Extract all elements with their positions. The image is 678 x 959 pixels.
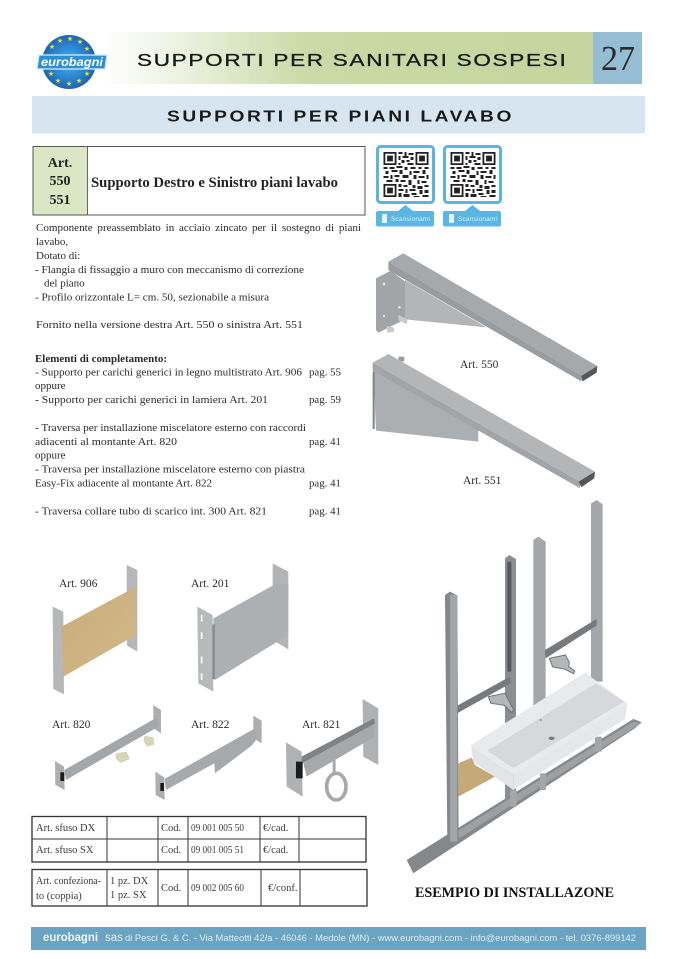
label: Art. 821: Art. 821	[302, 719, 341, 731]
label: Art. 906: Art. 906	[59, 578, 98, 590]
completion elements list: - Supporto per carichi generici in lamiera Art. 201	[35, 394, 268, 406]
product image: Art. 906	[53, 565, 137, 694]
product image: Art. 201	[197, 563, 288, 692]
table: packaged pair: Cod.	[161, 883, 181, 894]
icon: eurobagni logo: ★	[67, 35, 73, 43]
completion elements list: pag. 41	[309, 436, 341, 448]
page number box	[593, 32, 642, 84]
table: packaged pair: 09 002 005 60	[191, 883, 244, 894]
product image: Art. 821	[286, 699, 378, 800]
description text: Fornito nella versione destra Art. 550 o sinistra Art. 551	[36, 319, 303, 331]
cross feet	[510, 737, 602, 807]
completion elements list: - Supporto per carichi generici in legno multistrato Art. 906	[35, 366, 303, 378]
completion elements list: pag. 55	[309, 366, 341, 378]
product image: bracket Art. 551	[373, 354, 595, 488]
icon: eurobagni logo: ★	[84, 45, 90, 53]
QR code 2	[443, 146, 501, 226]
article title table: Art.	[48, 156, 72, 171]
completion elements list: - Traversa per installazione miscelatore esterno con piastra	[35, 464, 305, 476]
table: packaged pair: to (coppia)	[36, 891, 82, 902]
icon: eurobagni logo: ★	[55, 77, 61, 85]
description text	[35, 222, 361, 331]
completion elements list: - Traversa per installazione miscelatore esterno con raccordi	[35, 422, 306, 434]
QR code 1: Scansionami	[391, 216, 430, 223]
icon: eurobagni logo: eurobagni	[41, 55, 104, 69]
description text: lavabo,	[36, 236, 68, 248]
QR code 2: Scansionami	[458, 216, 497, 223]
description text: - Flangia di fissaggio a muro con meccanismo di correzione	[35, 264, 304, 276]
table: loose articles	[32, 816, 366, 862]
icon: eurobagni logo: ★	[76, 77, 82, 85]
header band	[103, 32, 593, 84]
header title: SUPPORTI PER SANITARI SOSPESI	[137, 51, 566, 70]
front upright	[445, 592, 459, 842]
label: Art. 820: Art. 820	[52, 719, 91, 731]
article title table: 550	[50, 174, 70, 189]
icon: eurobagni logo	[37, 35, 107, 89]
bottom rail	[407, 719, 642, 873]
page number box: 27	[601, 39, 635, 78]
table: loose articles: €/cad.	[263, 845, 288, 856]
installation caption: ESEMPIO DI INSTALLAZONE	[415, 885, 614, 901]
table: packaged pair: Art. confeziona-	[36, 876, 101, 887]
table: loose articles: Art. sfuso DX	[36, 823, 96, 834]
table: loose articles: €/cad.	[263, 823, 288, 834]
article title table: Supporto Destro e Sinistro piani lavabo	[91, 175, 338, 191]
article title table	[33, 146, 365, 215]
footer bar: sas	[105, 932, 123, 944]
label: Art. 201: Art. 201	[191, 578, 230, 590]
QR code 1	[376, 146, 434, 226]
product image: bracket Art. 550	[376, 253, 597, 381]
completion elements list: Easy-Fix adiacente al montante Art. 822	[35, 478, 212, 490]
table: packaged pair: 1 pz. SX	[110, 890, 147, 901]
table: packaged pair: €/conf.	[268, 883, 297, 894]
section heading band: SUPPORTI PER PIANI LAVABO	[167, 107, 511, 125]
footer bar: di Pesci G. & C. - Via Matteotti 42/a - 46046 - Medole (MN) - www.eurobagni.com - info@eurobagni.com - tel. 0376-899142	[125, 933, 636, 944]
completion elements list: pag. 59	[309, 394, 341, 406]
completion elements list: - Traversa collare tubo di scarico int. 300 Art. 821	[35, 506, 267, 518]
product image: Art. 820	[55, 705, 161, 790]
completion elements list	[35, 353, 341, 518]
completion elements list: pag. 41	[309, 506, 341, 518]
wooden support	[458, 758, 495, 797]
icon: eurobagni logo: ★	[84, 70, 90, 78]
table: packaged pair	[32, 870, 367, 906]
completion elements list: Elementi di completamento:	[35, 353, 167, 365]
product image: Art. 822	[155, 716, 262, 800]
rear rail	[517, 739, 603, 800]
washbasin	[471, 673, 627, 790]
completion elements list: adiacenti al montante Art. 820	[35, 436, 178, 448]
completion elements list: oppure	[35, 380, 66, 392]
label: Art. 822: Art. 822	[191, 719, 230, 731]
description text: Componente preassemblato in acciaio zincato per il sostegno di piani	[36, 222, 361, 234]
footer bar	[31, 927, 646, 950]
section heading band	[32, 96, 645, 134]
icon: eurobagni logo: ★	[49, 43, 55, 51]
article title table: 551	[50, 193, 70, 208]
icon: eurobagni logo: ★	[48, 70, 54, 78]
installation example illustration	[407, 500, 642, 873]
description text: Dotato di:	[36, 250, 80, 262]
label: Art. 550: Art. 550	[460, 359, 499, 371]
crossbars and taps	[457, 619, 597, 713]
footer bar: eurobagni	[43, 932, 98, 944]
icon: eurobagni logo: ★	[66, 80, 72, 88]
table: loose articles: Art. sfuso SX	[36, 845, 94, 856]
completion elements list: pag. 41	[309, 478, 341, 490]
table: loose articles: 09 001 005 51	[191, 845, 244, 856]
table: loose articles: Cod.	[161, 845, 181, 856]
rear uprights	[505, 500, 603, 805]
completion elements list: oppure	[35, 450, 66, 462]
table: packaged pair: 1 pz. DX	[110, 876, 149, 887]
description text: del piano	[44, 278, 85, 290]
icon: eurobagni logo: ★	[77, 38, 83, 46]
table: loose articles: 09 001 005 50	[191, 823, 244, 834]
table: loose articles: Cod.	[161, 823, 181, 834]
icon: eurobagni logo: ★	[57, 37, 63, 45]
label: Art. 551: Art. 551	[463, 475, 502, 487]
description text: - Profilo orizzontale L= cm. 50, sezionabile a misura	[35, 292, 269, 304]
